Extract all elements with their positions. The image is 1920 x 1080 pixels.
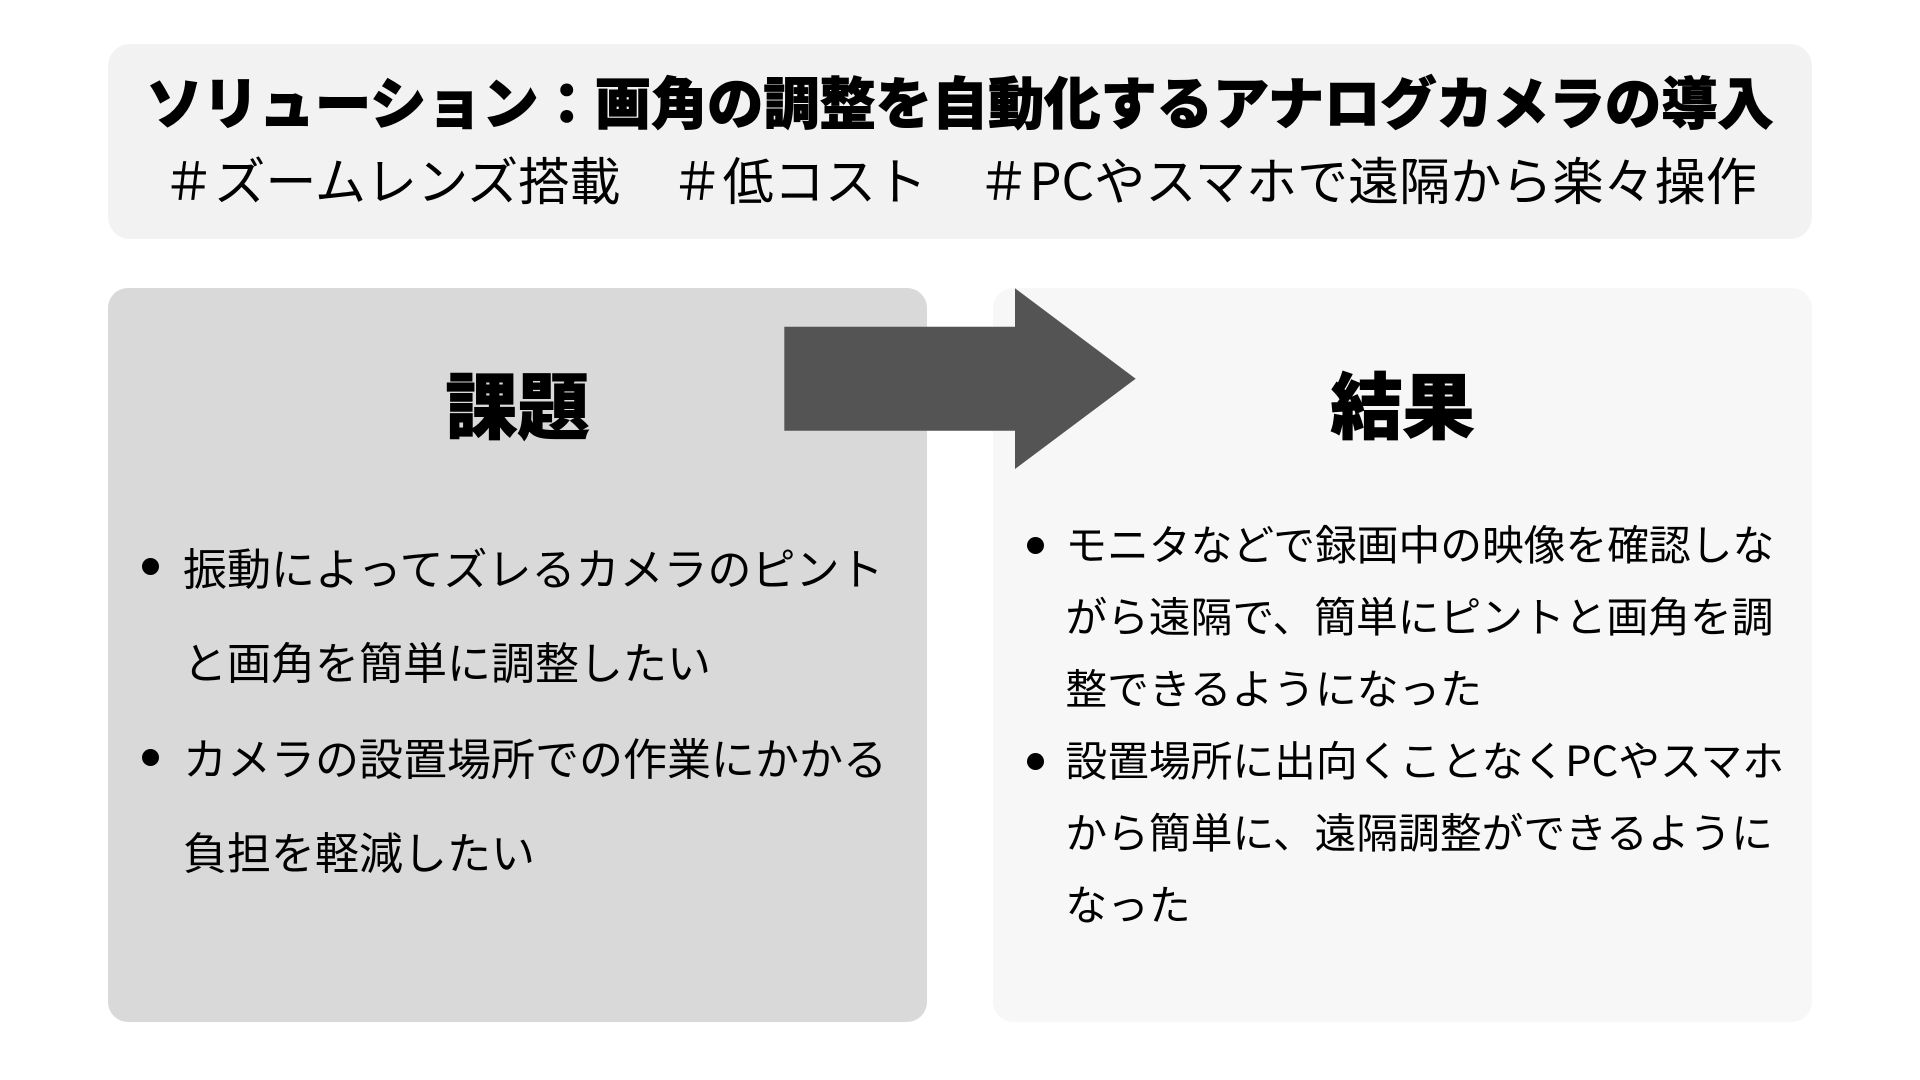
results list xyxy=(1027,513,1784,933)
heading: results: 結果 xyxy=(1330,348,1474,454)
panel: header xyxy=(108,44,1812,239)
bullet 2 xyxy=(142,748,158,766)
issues list xyxy=(142,534,887,882)
result 2 line 1: 設置場所に出向くことなくPCやスマホ xyxy=(1065,729,1784,789)
result 2 line 3: なった xyxy=(1065,873,1191,933)
title: ソリューション：画角の調整を自動化するアナログカメラの導入 xyxy=(146,60,1774,141)
result 2 line 2: から簡単に、遠隔調整ができるように xyxy=(1065,801,1773,861)
bullet 1 xyxy=(1026,536,1044,554)
bullet 2 xyxy=(1026,753,1044,770)
issue 2 line 2: 負担を軽減したい xyxy=(183,818,535,882)
issue 1 line 1: 振動によってズレるカメラのピント xyxy=(183,534,883,598)
issue 1 line 2: と画角を簡単に調整したい xyxy=(183,628,711,692)
panel: results xyxy=(993,288,1812,1022)
arrow xyxy=(784,288,1136,469)
subtitle tags: ＃ズームレンズ搭載 ＃低コスト ＃PCやスマホで遠隔から楽々操作 xyxy=(163,141,1757,215)
result 1 line 1: モニタなどで録画中の映像を確認しな xyxy=(1065,513,1774,573)
issue 2 line 1: カメラの設置場所での作業にかかる xyxy=(183,724,887,788)
bullet 1 xyxy=(142,558,158,575)
result 1 line 2: がら遠隔で、簡単にピントと画角を調 xyxy=(1065,585,1773,645)
heading: issues: 課題 xyxy=(445,348,590,454)
result 1 line 3: 整できるようになった xyxy=(1065,657,1482,717)
panel: issues xyxy=(108,288,927,1022)
